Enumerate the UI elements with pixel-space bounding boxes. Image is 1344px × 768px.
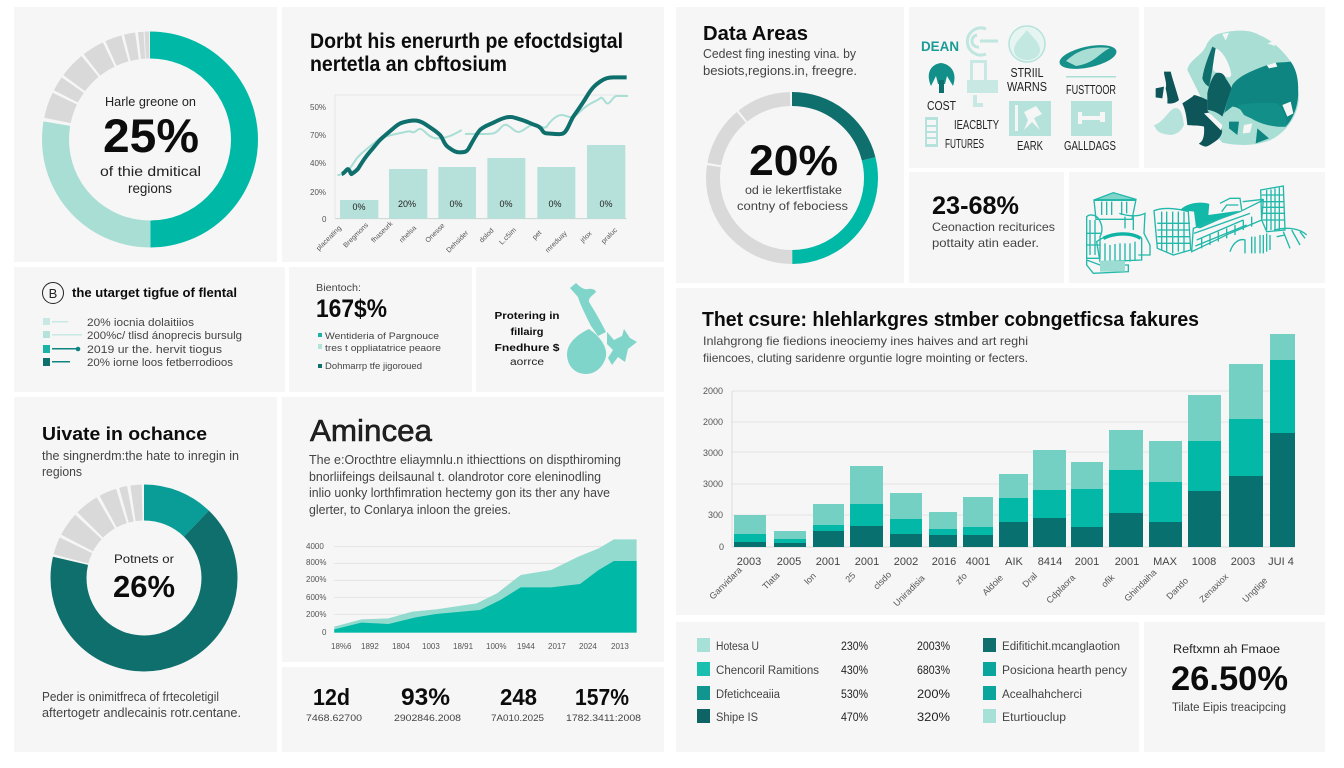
- y axis and gridlines: 0: [719, 542, 724, 552]
- y axis and gridlines: 2000: [703, 417, 723, 427]
- row 4: Shipe IS: [716, 712, 758, 724]
- area chart: 2013: [611, 642, 629, 651]
- panel: 26.50% stat: [1144, 622, 1325, 752]
- caption: [932, 220, 1055, 250]
- label: STRIIL WARNS: [1007, 65, 1047, 94]
- stat: 157%: 1782.3411:2008: [566, 713, 641, 724]
- stat: 248: [491, 684, 544, 724]
- panel: building illustration: [1069, 172, 1325, 283]
- icon label: DEAN: DEAN: [921, 38, 959, 54]
- x axis labels: Ganvidara: [707, 565, 744, 601]
- heading: Uivate in ochance: [42, 423, 207, 444]
- area chart: 2017: [548, 642, 566, 651]
- subheading: the singnerdm:the hate to inregin in: [42, 449, 239, 463]
- heading: [310, 30, 623, 76]
- icon: bar stack: [925, 117, 938, 147]
- x axis labels: 2005: [777, 556, 801, 568]
- paragraph: The e:Orocthtre eliaymnlu.n ithiecttions on dispthiroming: [309, 453, 621, 467]
- combo chart: Bregmons: [342, 222, 370, 249]
- row 3: 200%: [917, 689, 950, 701]
- row 4: [697, 709, 1066, 724]
- x axis labels: JUI 4: [1268, 556, 1294, 568]
- y axis and gridlines: 300: [708, 510, 723, 520]
- heading: Amincea: [310, 413, 433, 448]
- panel: 25% donut: [14, 7, 277, 262]
- x axis labels: [707, 556, 1294, 608]
- subheading: regions: [42, 465, 82, 479]
- row 2: 430%: [841, 665, 868, 677]
- combo chart: 0%: [499, 199, 513, 209]
- row 4: 320%: [917, 712, 950, 724]
- combo chart: [310, 77, 628, 254]
- combo chart: Onesse: [424, 222, 447, 244]
- row 2: Chencoril Ramitions: [716, 665, 819, 677]
- row 2: 6803%: [917, 665, 950, 677]
- area chart: 2024: [579, 642, 597, 651]
- footnote: Peder is onimitfreca of frtecoletigil: [42, 690, 219, 704]
- combo chart: Dehsider: [445, 229, 471, 254]
- area chart: 1804: [392, 642, 410, 651]
- illustration: building: [1087, 186, 1307, 273]
- subheading: Cedest fing inesting vina. by: [703, 47, 857, 61]
- x axis labels: MAX: [1153, 556, 1178, 568]
- combo chart: 0%: [548, 199, 562, 209]
- donut label: of thie dmitical: [100, 163, 201, 179]
- row 4: 470%: [841, 712, 868, 724]
- stacked bars: [734, 334, 1295, 547]
- combo chart: 0%: [449, 199, 463, 209]
- panel: Europe map: [1144, 7, 1325, 168]
- panel: line and bar chart: [282, 7, 664, 262]
- icon: device: [967, 60, 998, 107]
- icon: globe badge: [1009, 26, 1045, 62]
- combo chart: L.c5im: [498, 227, 518, 246]
- stat: 93%: 93%: [401, 684, 450, 711]
- stat: 93%: [394, 684, 461, 724]
- donut label: 20%: [749, 137, 838, 185]
- area chart: 4000: [306, 542, 324, 551]
- icon: tile EARK: [1009, 101, 1051, 136]
- caption: Fnedhure $: [494, 342, 560, 354]
- stat: 157%: [566, 684, 641, 724]
- panel: icon grid: [909, 7, 1139, 168]
- stat: 248: 7A010.2025: [491, 713, 544, 724]
- combo chart: placeating: [315, 225, 343, 252]
- donut label: [113, 552, 175, 604]
- legend list: 2019 ur the. hervit tiogus: [87, 344, 223, 356]
- x axis labels: Cdplaora: [1044, 573, 1077, 605]
- x axis labels: 4001: [966, 556, 990, 568]
- stat: 12d: 7468.62700: [306, 713, 362, 724]
- combo chart: 70%: [310, 131, 326, 140]
- icon: disc: [1057, 41, 1119, 78]
- area chart: 1944: [517, 642, 535, 651]
- stat: 157%: 157%: [575, 684, 629, 710]
- x axis labels: 2001: [855, 556, 879, 568]
- legend list: 200%c/ tlisd ánoprecis bursulg: [87, 330, 242, 342]
- combo chart: dolod: [478, 227, 496, 244]
- area chart: 0: [322, 628, 327, 637]
- x axis labels: Zenaxiox: [1197, 571, 1231, 604]
- row 1: 2003%: [917, 641, 950, 653]
- panel: data areas: [676, 7, 904, 283]
- combo chart: 50%: [310, 103, 326, 112]
- row 3: Acealhahcherci: [1002, 689, 1082, 701]
- paragraph: glerter, to Conlarya inloon the greies.: [309, 503, 511, 517]
- footnote: [42, 690, 241, 720]
- x axis labels: Uniradisia: [891, 573, 927, 608]
- subheading: fiiencoes, cluting saridenre orguntie logre mointing or fecters.: [703, 351, 1028, 365]
- panel: stacked bar chart: [676, 288, 1325, 615]
- label: FUSTTOOR: FUSTTOOR: [1066, 82, 1116, 97]
- area chart: 1003: [422, 642, 440, 651]
- bullets: [318, 331, 441, 371]
- row 2: [697, 662, 1127, 677]
- x axis labels: clsdo: [871, 569, 893, 591]
- row 1: Edifitichit.mcanglaotion: [1002, 641, 1120, 653]
- badge B: [42, 282, 64, 304]
- x axis labels: Dral: [1020, 571, 1039, 589]
- panel: range stat: [909, 172, 1064, 283]
- bullets: Dohmarrp tfe jigoroued: [325, 361, 422, 371]
- y axis and gridlines: 2000: [703, 386, 723, 396]
- label: EARK: EARK: [1017, 138, 1043, 153]
- donut chart: 25%: [56, 45, 244, 234]
- label: FUTURES: FUTURES: [945, 136, 984, 151]
- combo chart: 0: [322, 215, 327, 224]
- area chart: 1892: [361, 642, 379, 651]
- x axis labels: 8414: [1038, 556, 1062, 568]
- x axis labels: AIK: [1005, 556, 1024, 568]
- donut chart: 26%: [68, 502, 220, 654]
- label: STRIIL WARNS: WARNS: [1007, 79, 1047, 94]
- row 4: Eturtiouclup: [1002, 712, 1066, 724]
- subheading: [703, 47, 857, 78]
- combo chart: 0%: [352, 202, 366, 212]
- panel: legend table: [676, 622, 1139, 752]
- donut label: [737, 137, 848, 213]
- stat: 12d: [306, 684, 362, 724]
- heading: Data Areas: [703, 23, 808, 45]
- heading: nertetla an cbftosium: [310, 53, 507, 76]
- area chart: 100%: [486, 642, 506, 651]
- caption: fiIlairg: [510, 326, 544, 338]
- donut label: od ie lekertfistake: [745, 183, 842, 197]
- combo chart: fhaseurk: [370, 220, 395, 244]
- label: STRIIL WARNS: STRIIL: [1010, 65, 1044, 80]
- caption: [494, 310, 560, 368]
- stat: 167$%: [316, 295, 387, 323]
- x axis labels: 1008: [1192, 556, 1216, 568]
- area chart: 18/91: [453, 642, 474, 651]
- panel: 26% donut: [14, 397, 277, 752]
- row 3: 530%: [841, 689, 868, 701]
- x axis labels: Aldoie: [980, 573, 1005, 597]
- combo chart: 20%: [398, 199, 416, 209]
- x axis labels: 2001: [1075, 556, 1099, 568]
- stat: 93%: 2902846.2008: [394, 713, 461, 724]
- badge B: B: [49, 286, 57, 301]
- icon: circular arrow: [967, 28, 998, 55]
- stat: 23-68%: [932, 192, 1019, 220]
- map of Europe: [1154, 31, 1299, 147]
- legend list: [43, 317, 242, 369]
- subheading: [703, 334, 1028, 365]
- footnote: aftertogetr andlecainis rotr.centane.: [42, 706, 241, 720]
- combo chart: nhelsa: [398, 225, 418, 244]
- combo chart: 20%: [310, 188, 326, 197]
- label: COST: COST: [927, 98, 956, 113]
- row 1: Hotesa U: [716, 641, 759, 653]
- icon: region shape: [567, 283, 637, 374]
- stat: Bientoch:: [316, 283, 361, 294]
- area chart: [306, 539, 637, 651]
- donut chart: 20%: [713, 99, 871, 257]
- subheading: besiots,regions.in, freegre.: [703, 64, 857, 78]
- caption: pottaity atin eader.: [932, 236, 1039, 250]
- heading: the utarget tigfue of flental: [72, 286, 237, 300]
- panel: 167% stat: [289, 267, 472, 392]
- x axis labels: Ghindaiha: [1122, 567, 1158, 603]
- x axis labels: 25: [843, 570, 857, 584]
- donut label: contny of febociess: [737, 199, 848, 213]
- stat caption top: Reftxmn ah Fmaoe: [1173, 644, 1280, 656]
- icon: tree: [929, 63, 955, 93]
- row 1: 230%: [841, 641, 868, 653]
- combo chart: pet: [531, 230, 543, 241]
- legend list: 20% iorne loos fetberrodioos: [87, 357, 234, 369]
- x axis labels: 2001: [1115, 556, 1139, 568]
- paragraph: inlio uonky lorthfimration hectemy gon its ther any have: [309, 486, 610, 500]
- donut label: [100, 94, 201, 196]
- donut label: Harle greone on: [105, 94, 196, 109]
- combo chart: 40%: [310, 159, 326, 168]
- caption: aorrce: [510, 357, 545, 368]
- donut label: Potnets or: [114, 552, 174, 566]
- stat: 248: 248: [500, 684, 537, 710]
- row 2: Posiciona hearth pency: [1002, 665, 1127, 677]
- y axis and gridlines: [703, 386, 1295, 552]
- stat caption bottom: Tilate Eipis treacipcing: [1172, 702, 1286, 714]
- bullets: Wentideria of Pargnouce: [325, 331, 439, 341]
- combo chart: mreduay: [544, 230, 569, 254]
- donut label: 25%: [103, 109, 199, 162]
- subheading: Inlahgrong fie fiedions ineociemy ines haives and art reghi: [703, 334, 1028, 348]
- x axis labels: 2002: [894, 556, 918, 568]
- combo chart: praluc: [600, 227, 619, 245]
- row 1: [697, 638, 1120, 653]
- stat: [316, 283, 387, 323]
- x axis labels: 2003: [737, 556, 761, 568]
- heading: Dorbt his enerurth pe efoctdsigtal: [310, 30, 623, 53]
- paragraph: [309, 453, 621, 517]
- bullets: tres t oppliatatrice peaore: [325, 343, 441, 353]
- panel: area chart: [282, 397, 664, 662]
- paragraph: bnorliifeings deilsaunal t. olandrotor core eleninodling: [309, 470, 601, 484]
- area chart: 800%: [306, 558, 326, 567]
- x axis labels: Ungtige: [1240, 575, 1269, 604]
- label: GALLDAGS: GALLDAGS: [1064, 138, 1116, 153]
- x axis labels: 2001: [816, 556, 840, 568]
- caption: Ceonaction reciturices: [932, 220, 1055, 234]
- stat: 12d: 12d: [313, 684, 350, 710]
- x axis labels: zfo: [953, 571, 969, 586]
- y axis and gridlines: 3000: [703, 479, 723, 489]
- icon: tile GALLDAGS: [1071, 101, 1112, 136]
- legend list: 20% iocnia dolaitiios: [87, 317, 195, 329]
- panel: drop map: [476, 267, 664, 392]
- area chart: 600%: [306, 593, 326, 602]
- area chart: 200%: [306, 610, 326, 619]
- panel: target legend: [14, 267, 285, 392]
- row 3: [697, 686, 1082, 701]
- subheading: [42, 449, 239, 479]
- combo chart: jrlox: [579, 230, 594, 245]
- label: IEACBLTY: IEACBLTY: [954, 117, 999, 132]
- heading: Thet csure: hlehlarkgres stmber cobngetficsa fakures: [702, 309, 1199, 331]
- area chart: 18%6: [331, 642, 352, 651]
- stat value: 26.50%: [1171, 660, 1288, 698]
- x axis labels: Dando: [1164, 576, 1190, 601]
- row 3: Dfetichceaiia: [716, 689, 781, 701]
- caption: Protering in: [494, 310, 560, 322]
- x axis labels: Tlata: [760, 570, 782, 591]
- donut label: regions: [128, 180, 172, 196]
- x axis labels: lon: [802, 571, 818, 586]
- donut label: 26%: [113, 569, 175, 604]
- area chart: 200%: [306, 575, 326, 584]
- x axis labels: 2016: [932, 556, 956, 568]
- combo chart: 0%: [599, 199, 613, 209]
- panel: stat row: [282, 667, 664, 752]
- x axis labels: 2003: [1231, 556, 1255, 568]
- x axis labels: ofik: [1099, 572, 1117, 589]
- y axis and gridlines: 3000: [703, 448, 723, 458]
